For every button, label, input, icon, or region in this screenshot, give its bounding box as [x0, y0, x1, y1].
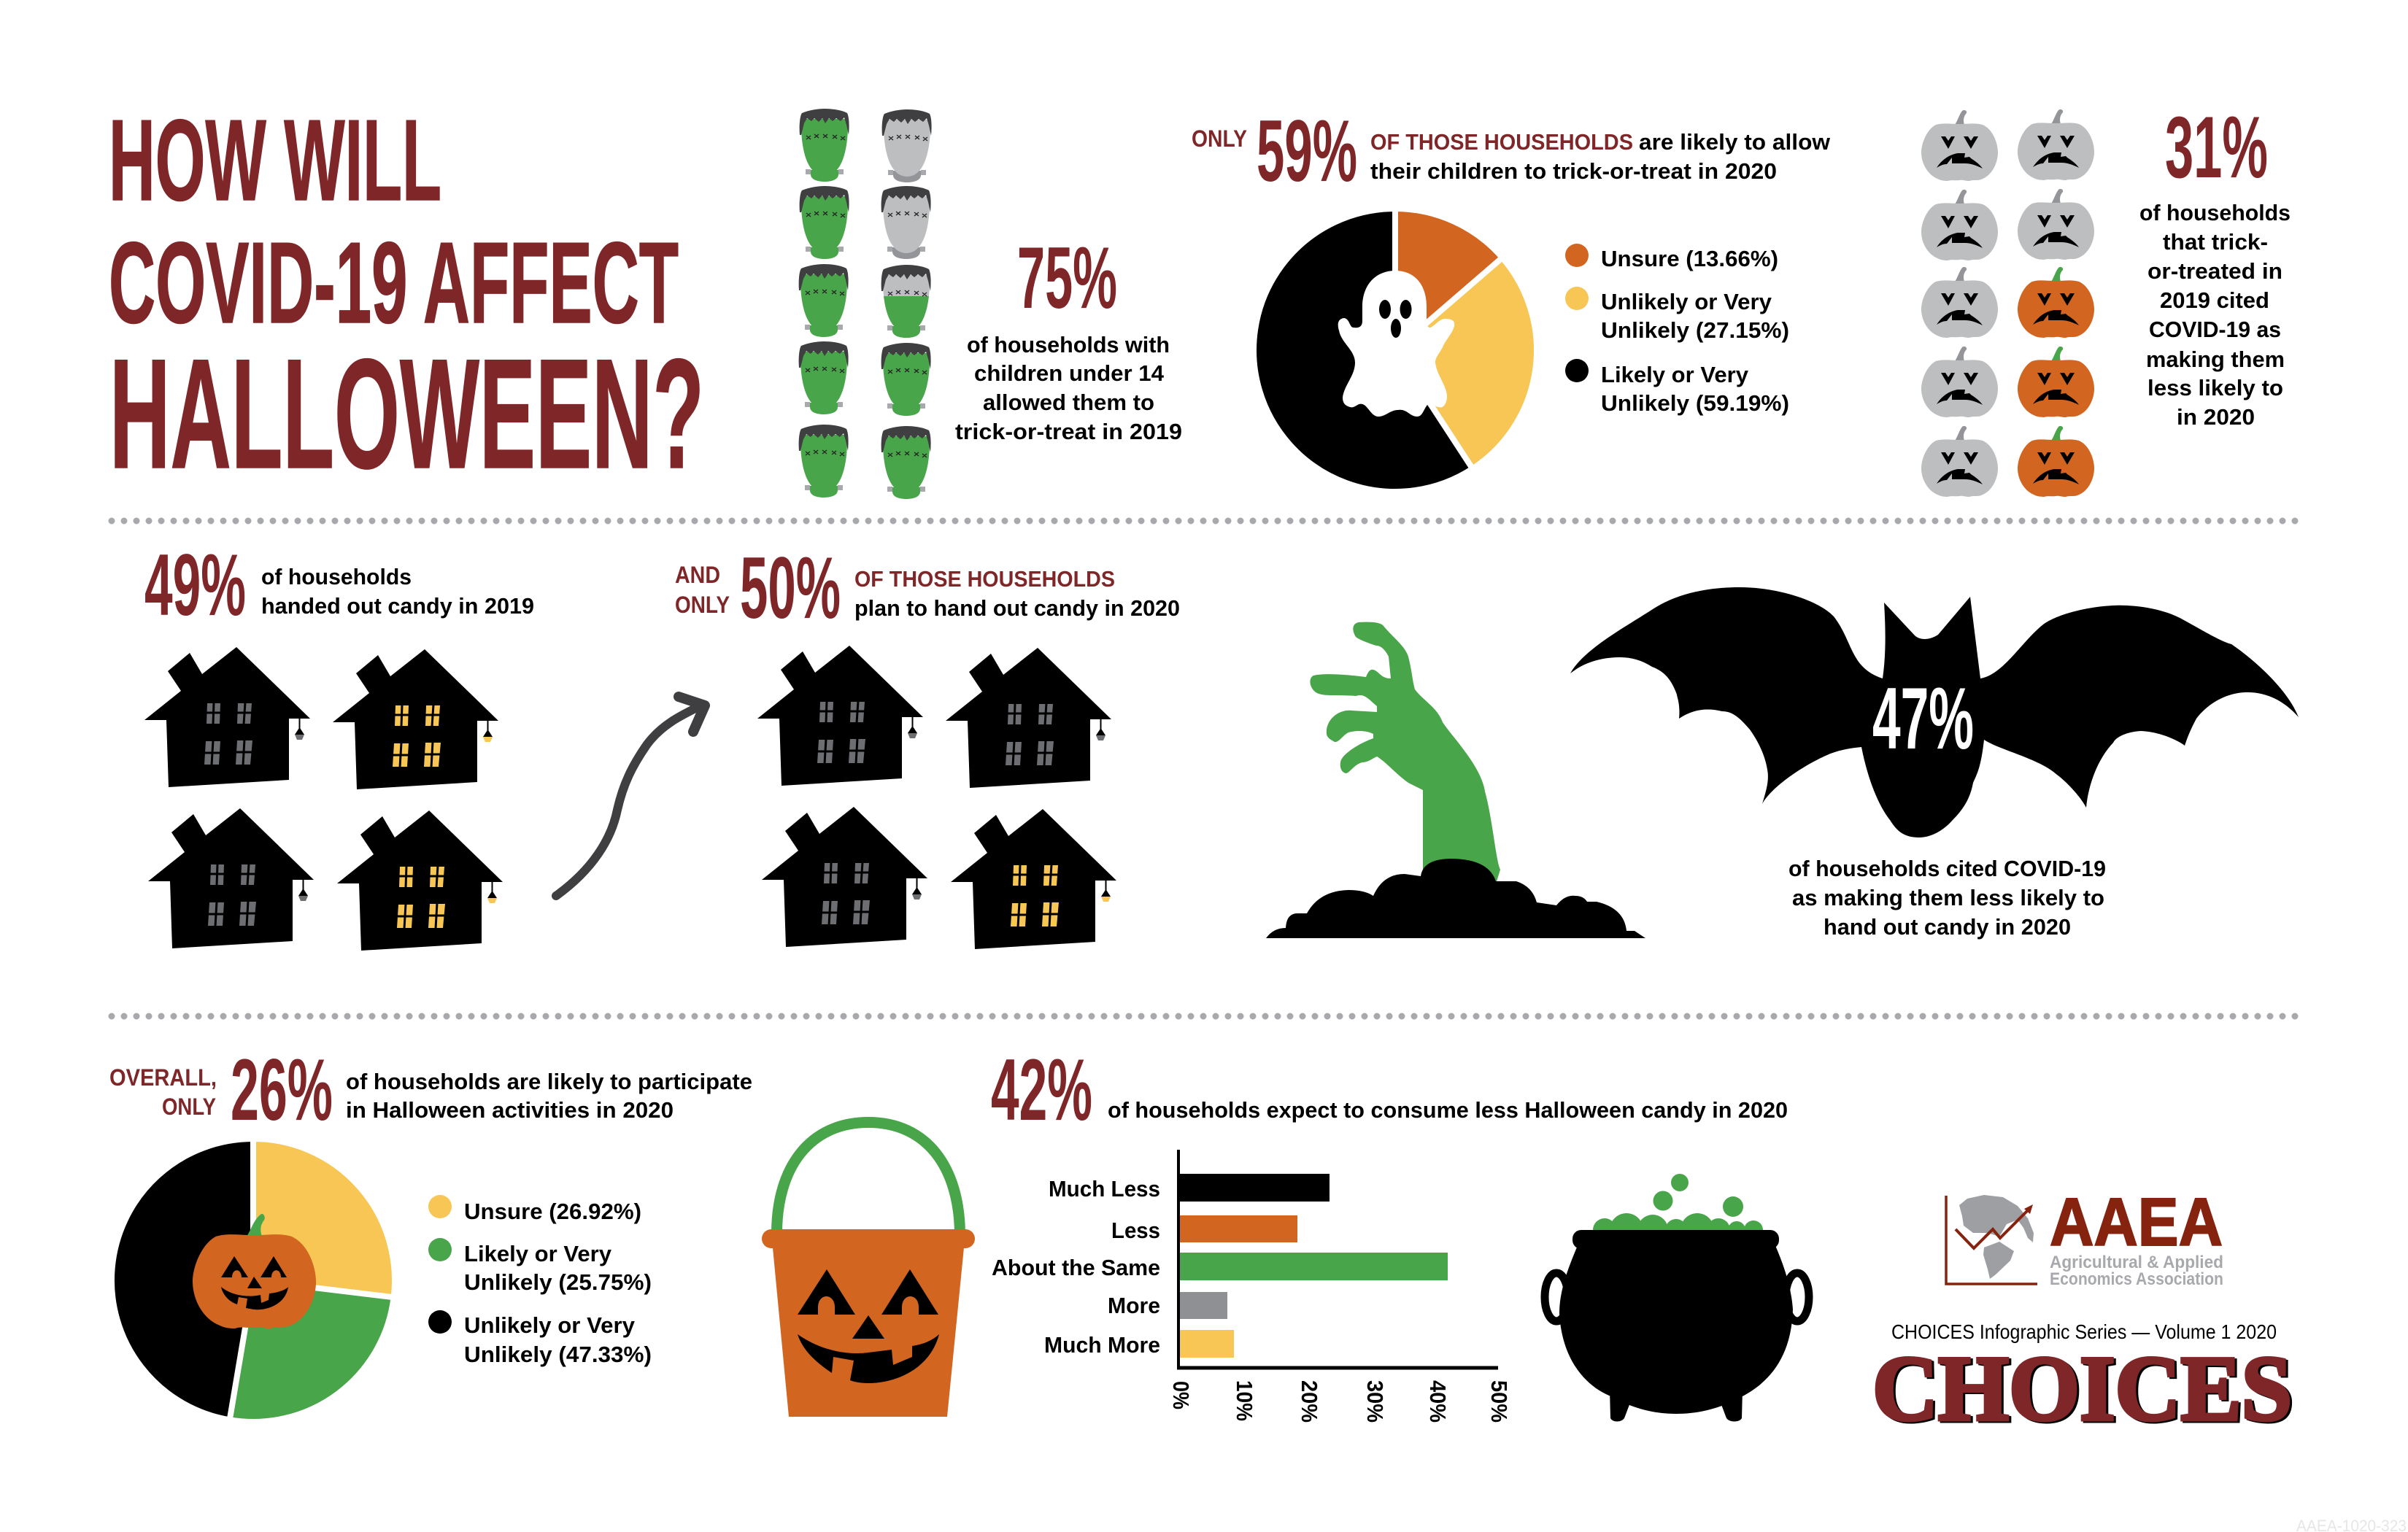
stat: 59 percent heading: ONLY [1192, 125, 1247, 152]
logo: AAEA: AAEA [2050, 1184, 2223, 1260]
bar chart: candy consumption: 50% [1486, 1380, 1512, 1423]
stat: 31 percent: making them [2146, 347, 2285, 372]
stat: 49 percent handed out candy: handed out candy in 2019 [261, 593, 534, 619]
icon: bat [1570, 587, 2299, 837]
text: 47 percent caption: as making them less likely to [1792, 885, 2104, 910]
stat: 26 percent heading: 26% [231, 1041, 333, 1139]
icon: grave mound [1266, 859, 1645, 938]
legend: Halloween activities: Unlikely or Very [464, 1312, 636, 1338]
text: series line: CHOICES Infographic Series — Volume 1 2020 [1891, 1320, 2277, 1343]
stat: 49 percent handed out candy: 49% [144, 536, 246, 634]
stat: 26 percent heading: in Halloween activities in 2020 [346, 1097, 674, 1123]
legend: Halloween activities: Unsure (26.92%) [464, 1199, 641, 1224]
bar chart: candy consumption: Much More [1044, 1332, 1160, 1358]
icon: ghost [1338, 271, 1454, 417]
logo: AAEA [1946, 1184, 2223, 1289]
title: COVID-19 AFFECT [109, 219, 679, 347]
stat: 59 percent heading [1192, 102, 1831, 200]
stat: 75 percent trick-or-treat 2019: children under 14 [974, 360, 1165, 386]
pie chart: Halloween activities [112, 1139, 395, 1422]
stat: 42 percent heading [991, 1041, 1788, 1139]
stat: 59 percent heading: are likely to allow [1639, 129, 1831, 155]
legend: Halloween activities: Unlikely (47.33%) [464, 1342, 652, 1367]
icon: jack-o-lantern [193, 1214, 316, 1328]
pie chart: trick-or-treat 2020 [1254, 209, 1537, 492]
text: 47 percent caption [1788, 856, 2106, 940]
logo: AAEA: Economics Association [2050, 1269, 2223, 1289]
legend: trick-or-treat 2020: Unlikely or Very [1601, 289, 1772, 314]
stat: 31 percent [2139, 98, 2291, 430]
stat: 49 percent handed out candy [144, 536, 534, 634]
icon grid: frowning pumpkins [1921, 109, 2094, 497]
stat: 26 percent heading [109, 1041, 752, 1139]
stat: 31 percent: of households [2139, 200, 2291, 225]
stat: 26 percent heading: OVERALL, [109, 1064, 217, 1091]
stat: 75 percent trick-or-treat 2019: trick-or-treat in 2019 [955, 419, 1182, 444]
stat: 31 percent: in 2020 [2177, 404, 2255, 430]
legend: trick-or-treat 2020: Unlikely (59.19%) [1601, 390, 1789, 416]
stat: 31 percent: 2019 cited [2160, 287, 2269, 313]
bar chart: candy consumption: 0% [1168, 1381, 1194, 1409]
bar chart: candy consumption: Less [1111, 1218, 1160, 1243]
stat: 50 percent plan to hand out candy [675, 539, 1180, 637]
legend: Halloween activities [428, 1195, 652, 1367]
stat: 49 percent handed out candy: of households [261, 564, 412, 589]
stat: 26 percent heading: ONLY [162, 1094, 216, 1120]
stat: 50 percent plan to hand out candy: OF THOSE HOUSEHOLDS [854, 566, 1115, 592]
legend: trick-or-treat 2020 [1565, 244, 1789, 416]
stat: 31 percent: COVID-19 as [2149, 317, 2281, 342]
stat: 50 percent plan to hand out candy: 50% [740, 539, 841, 637]
stat: 31 percent: less likely to [2147, 375, 2283, 401]
stat: 75 percent trick-or-treat 2019 [955, 229, 1182, 444]
legend: trick-or-treat 2020: Likely or Very [1601, 362, 1749, 387]
stat: 50 percent plan to hand out candy: ONLY [675, 592, 730, 618]
stat: 47 percent on bat: 47% [1872, 670, 1974, 767]
stat: 50 percent plan to hand out candy: AND [675, 562, 720, 588]
title [109, 96, 704, 501]
text: 47 percent caption: hand out candy in 2020 [1824, 914, 2071, 940]
icon: cauldron [1545, 1174, 1809, 1421]
stat: 59 percent heading: OF THOSE HOUSEHOLDS [1370, 129, 1633, 155]
bar chart: candy consumption: 10% [1232, 1380, 1257, 1421]
text: 47 percent caption: of households cited COVID-19 [1788, 856, 2106, 881]
stat: 42 percent heading: 42% [991, 1041, 1092, 1139]
legend: trick-or-treat 2020: Unsure (13.66%) [1601, 246, 1778, 271]
stat: 26 percent heading: of households are likely to participate [346, 1069, 752, 1094]
bar chart: candy consumption [992, 1150, 1512, 1423]
stat: 42 percent heading: of households expect to consume less Halloween candy in 2020 [1108, 1097, 1788, 1123]
bar chart: candy consumption: 20% [1297, 1380, 1322, 1423]
legend: trick-or-treat 2020: Unlikely (27.15%) [1601, 317, 1789, 343]
bar chart: candy consumption: 40% [1425, 1380, 1451, 1423]
arrow [556, 697, 705, 896]
stat: 59 percent heading: their children to trick-or-treat in 2020 [1370, 158, 1777, 184]
stat: 31 percent: 31% [2165, 98, 2268, 196]
icon grid: houses 2019 [144, 647, 503, 951]
logo: AAEA: Agricultural & Applied [2050, 1253, 2223, 1272]
bar chart: candy consumption: Much Less [1049, 1176, 1160, 1202]
stat: 31 percent: that trick- [2163, 229, 2268, 255]
icon grid: households who trick-or-treated [799, 109, 932, 499]
legend: Halloween activities: Likely or Very [464, 1241, 612, 1266]
title: HALLOWEEN? [109, 327, 704, 501]
bar chart: candy consumption: More [1108, 1293, 1160, 1318]
legend: Halloween activities: Unlikely (25.75%) [464, 1269, 652, 1295]
stat: 75 percent trick-or-treat 2019: of households with [967, 332, 1170, 357]
logo: CHOICES: CHOICES [1872, 1338, 2292, 1440]
icon grid: houses 2020 [757, 646, 1116, 949]
stat: 59 percent heading: 59% [1257, 102, 1357, 200]
bar chart: candy consumption: About the Same [992, 1255, 1160, 1280]
icon: zombie hand [1266, 622, 1645, 938]
bar chart: candy consumption: 30% [1362, 1380, 1388, 1423]
stat: 31 percent: or-treated in [2147, 258, 2282, 284]
icon: candy bucket [762, 1122, 975, 1417]
stat: 75 percent trick-or-treat 2019: 75% [1017, 229, 1117, 327]
title: HOW WILL [109, 96, 441, 225]
stat: 50 percent plan to hand out candy: plan to hand out candy in 2020 [854, 595, 1180, 621]
stat: 75 percent trick-or-treat 2019: allowed them to [983, 390, 1154, 415]
